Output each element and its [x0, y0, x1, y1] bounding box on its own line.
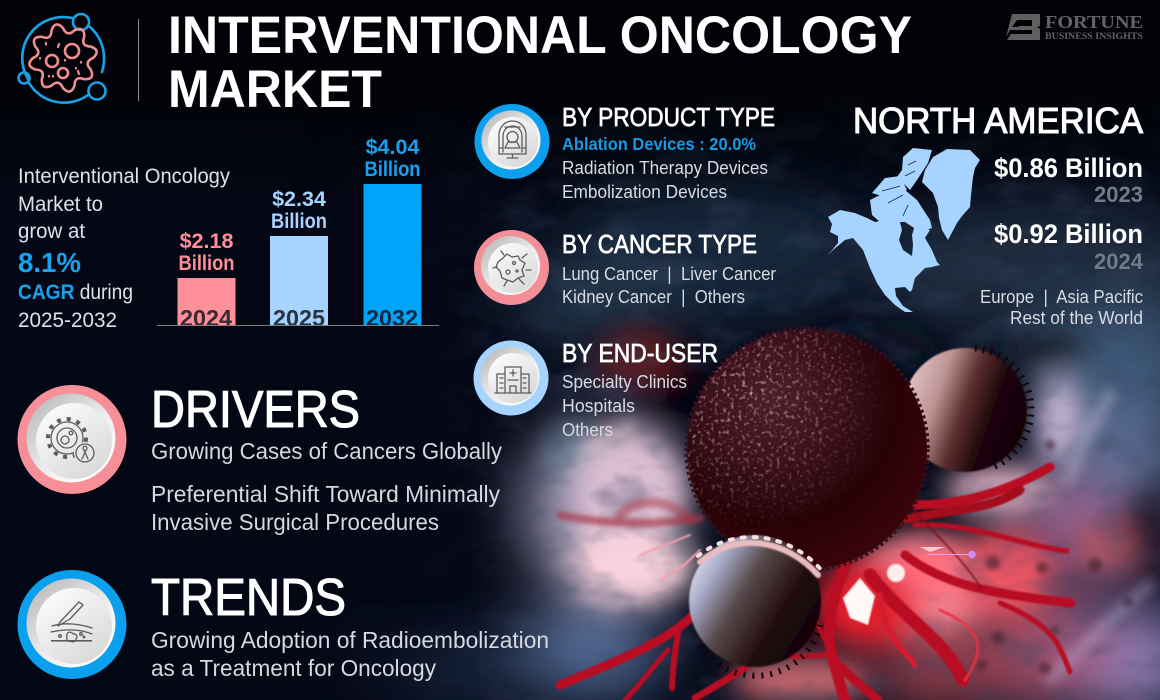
- bar: 2025: 2025: [273, 305, 325, 331]
- bar: 2032: $4.04: [366, 135, 419, 159]
- map: north america: [828, 148, 980, 312]
- panel: by end-user: BY END-USER: [562, 340, 718, 368]
- panel: by product type: [474, 104, 775, 202]
- icon: FB mark: [1006, 14, 1040, 40]
- panel: by end-user: [474, 340, 718, 440]
- title: [168, 6, 912, 119]
- bar: 2025: [270, 187, 328, 331]
- panel: drivers: Preferential Shift Toward Minimally: [151, 481, 500, 507]
- icon: gear cell with ribbon: [18, 385, 126, 494]
- panel: by end-user: Specialty Clinics: [562, 371, 687, 392]
- text: CAGR statement: Interventional Oncology: [18, 165, 230, 188]
- bar: 2024: Billion: [178, 252, 234, 275]
- panel: by product type: BY PRODUCT TYPE: [562, 104, 775, 132]
- panel: by cancer type: Kidney Cancer | Others: [562, 286, 745, 307]
- divider: [138, 19, 139, 101]
- panel: drivers: DRIVERS: [151, 381, 360, 439]
- text: CAGR statement: [18, 165, 230, 332]
- text: CAGR statement: CAGR during: [18, 281, 133, 304]
- right white cell: [903, 348, 1031, 472]
- panel: by cancer type: Lung Cancer | Liver Cancer: [562, 263, 776, 284]
- panel: north america: $0.92 Billion: [994, 219, 1143, 249]
- panel: trends: [18, 569, 549, 681]
- red glow: [813, 546, 959, 647]
- red tendrils: [560, 467, 1071, 700]
- bar: 2025: Billion: [271, 210, 327, 233]
- panel: drivers: Invasive Surgical Procedures: [151, 509, 439, 535]
- illustration: cancer cells and red tendrils: [560, 328, 1071, 700]
- dark tissue spots: [977, 440, 1133, 674]
- lower white cell: [689, 535, 823, 676]
- panel: north america: 2023: [1094, 182, 1143, 207]
- brand logo: BUSINESS INSIGHTS: [1045, 32, 1143, 42]
- panel: trends: Growing Adoption of Radioembolization: [151, 627, 549, 653]
- panel: trends: TRENDS: [151, 569, 346, 627]
- bar: 2025: $2.34: [272, 187, 326, 211]
- panel: by end-user: Others: [562, 419, 613, 440]
- panel: by product type: Embolization Devices: [562, 181, 727, 202]
- large dark cancer cell: [686, 328, 928, 570]
- icon: hospital: [474, 340, 548, 416]
- panel: north america: [828, 100, 1144, 328]
- panel: by end-user: Hospitals: [562, 395, 635, 416]
- bar: 2024: [178, 229, 236, 331]
- bar: 2032: 2032: [366, 305, 418, 331]
- panel: north america: $0.86 Billion: [994, 153, 1143, 183]
- bar: 2032: [364, 135, 422, 331]
- icon: scalpel on tissue: [18, 570, 126, 679]
- icon: MRI scanner: [474, 104, 550, 179]
- panel: by cancer type: BY CANCER TYPE: [562, 231, 757, 259]
- bar: 2024: 2024: [180, 305, 232, 331]
- bright glow between tendrils: [843, 547, 945, 625]
- panel: north america: NORTH AMERICA: [853, 100, 1143, 141]
- brand logo: FORTUNE: [1045, 12, 1143, 32]
- text: CAGR statement: grow at: [18, 220, 85, 243]
- bar: 2032: Billion: [364, 158, 420, 181]
- icon: cancer cell logo: [18, 14, 106, 103]
- panel: by product type: Ablation Devices : 20.0%: [562, 134, 756, 154]
- title: INTERVENTIONAL ONCOLOGY: [168, 6, 912, 65]
- brand logo: [1006, 12, 1143, 42]
- title: MARKET: [168, 60, 382, 119]
- panel: drivers: Growing Cases of Cancers Globally: [151, 438, 502, 464]
- panel: north america: 2024: [1094, 249, 1144, 274]
- lilac marker: [928, 551, 976, 558]
- icon: cancer cell: [474, 230, 549, 305]
- panel: drivers: [18, 381, 502, 535]
- panel: trends: as a Treatment for Oncology: [151, 655, 436, 681]
- panel: north america: Europe | Asia Pacific: [980, 286, 1143, 307]
- bar: 2024: $2.18: [180, 229, 233, 253]
- panel: north america: Rest of the World: [1010, 307, 1143, 328]
- text: CAGR statement: Market to: [18, 193, 103, 216]
- panel: by product type: Radiation Therapy Devices: [562, 157, 768, 178]
- panel: by cancer type: [474, 230, 776, 307]
- text: CAGR statement: 8.1%: [18, 247, 81, 278]
- bar chart: market size: [157, 135, 439, 331]
- text: CAGR statement: 2025-2032: [18, 309, 117, 332]
